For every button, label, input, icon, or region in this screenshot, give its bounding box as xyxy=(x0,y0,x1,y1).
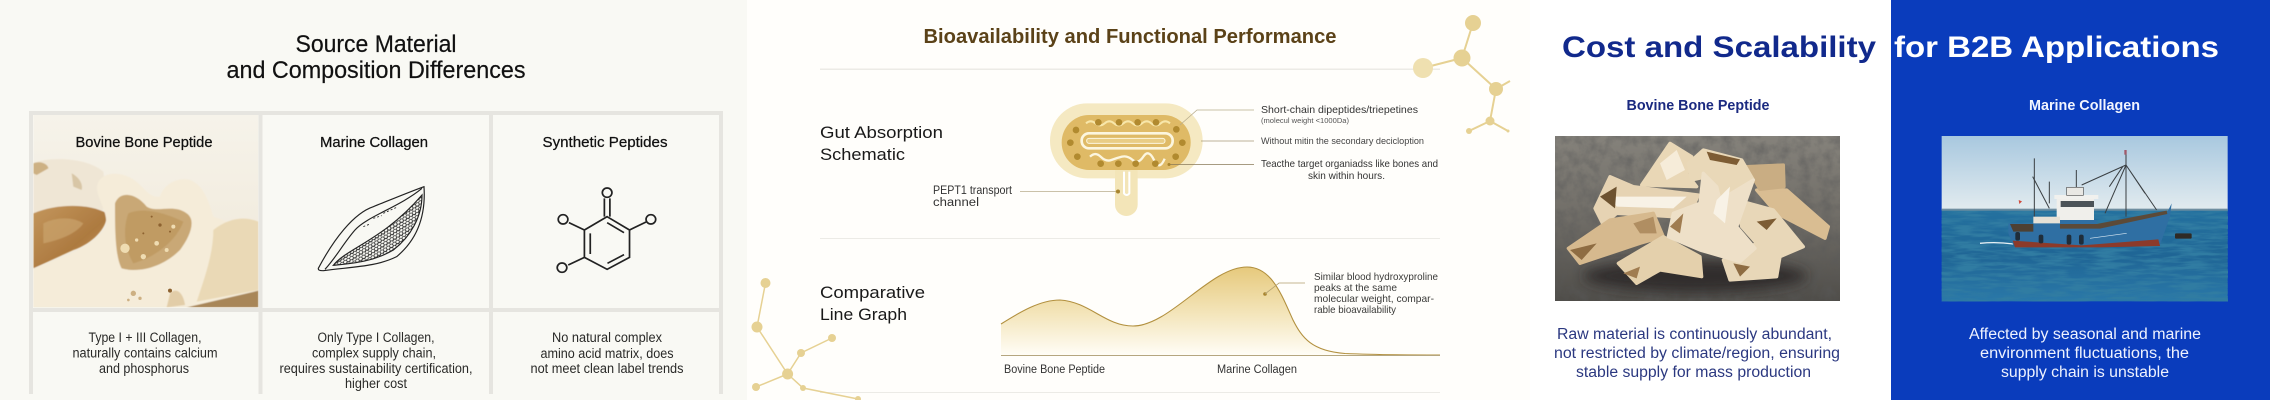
text: bovine composition: naturally contains calcium xyxy=(72,346,218,360)
text: chart annotation: peaks at the same xyxy=(1314,282,1397,294)
title: source material: and Composition Differences xyxy=(226,57,526,84)
callout: target organs xyxy=(1168,158,1438,182)
text: bovine scalability xyxy=(1554,326,1840,381)
molecule decoration: top right xyxy=(1413,15,1510,134)
text: bovine composition: Type I + III Collagen, xyxy=(88,330,202,345)
heading: comparative line graph xyxy=(820,283,925,324)
text: marine composition: Only Type I Collagen, xyxy=(318,330,434,345)
text: chart annotation: Similar blood hydroxyproline xyxy=(1314,271,1438,283)
title: source material xyxy=(226,31,526,84)
heading: comparative line graph: Line Graph xyxy=(820,305,907,324)
column heading: synthetic: Synthetic Peptides xyxy=(542,135,668,151)
text: bovine scalability: stable supply for mass production xyxy=(1576,364,1811,381)
column heading: bovine: Bovine Bone Peptide xyxy=(76,135,212,151)
callout: PEPT1 transport channel xyxy=(933,185,1120,209)
panel: bioavailability xyxy=(747,0,1530,400)
heading: gut absorption: Schematic xyxy=(820,145,906,164)
text: marine scalability: Affected by seasonal and marine xyxy=(1969,326,2201,343)
photo: pile of dried bones xyxy=(1555,136,1840,301)
icon: fish fillet xyxy=(318,187,424,271)
text: synthetic composition: amino acid matrix, does xyxy=(540,346,674,361)
title: source material: Source Material xyxy=(296,31,456,58)
chart: comparative line graph xyxy=(1001,267,1440,376)
heading: gut absorption xyxy=(820,123,943,164)
molecule decoration: bottom left xyxy=(752,278,861,400)
chart: comparative line graph: Bovine Bone Peptide xyxy=(1004,364,1105,376)
diagram: gut schematic xyxy=(1050,103,1203,216)
text: chart annotation xyxy=(1314,271,1438,316)
panel: cost and scalability, marine side xyxy=(1891,0,2270,400)
callout: short-chain peptides: (molecul weight <1000Da) xyxy=(1261,118,1349,125)
title: for B2B applications: for B2B Applications xyxy=(1894,31,2219,64)
heading: comparative line graph: Comparative xyxy=(820,283,925,302)
callout: without secondary decomposition: Without mitin the secondary decicloption xyxy=(1261,136,1424,147)
text: synthetic composition xyxy=(530,330,684,376)
text: synthetic composition: No natural complex xyxy=(552,330,662,345)
title: bioavailability: Bioavailability and Functional Performance xyxy=(924,25,1336,48)
text: marine scalability: environment fluctuations, the xyxy=(1980,345,2189,362)
text: bovine composition: and phosphorus xyxy=(99,361,189,376)
text: bovine composition xyxy=(72,330,218,376)
callout: short-chain peptides: Short-chain dipeptides/triepetines xyxy=(1261,104,1418,116)
heading: gut absorption: Gut Absorption xyxy=(820,123,943,142)
text: chart annotation: rable bioavailability xyxy=(1314,304,1397,316)
text: marine scalability xyxy=(1969,326,2201,381)
photo: fishing boat at sea xyxy=(1942,136,2228,301)
heading: bovine bone peptide: Bovine Bone Peptide xyxy=(1626,97,1770,114)
panel: source material and composition xyxy=(0,0,747,400)
column heading: marine: Marine Collagen xyxy=(320,135,428,151)
text: synthetic composition: not meet clean label trends xyxy=(530,361,684,376)
comparison grid frame xyxy=(29,111,723,394)
panel: cost and scalability, bovine side xyxy=(1530,0,1891,400)
callout: target organs: Teacthe target organiadss like bones and xyxy=(1261,158,1438,170)
callout: PEPT1 transport channel: PEPT1 transport xyxy=(933,185,1013,197)
text: bovine scalability: not restricted by climate/region, ensuring xyxy=(1554,345,1840,362)
heading: marine collagen: Marine Collagen xyxy=(2029,97,2140,114)
photo: bovine bone cross-section xyxy=(33,115,258,307)
icon: synthetic molecule xyxy=(557,188,656,272)
callout: PEPT1 transport channel: channel xyxy=(933,197,979,209)
text: bovine scalability: Raw material is continuously abundant, xyxy=(1557,326,1832,343)
text: marine composition: higher cost xyxy=(345,376,407,391)
text: marine composition xyxy=(280,330,472,391)
text: marine scalability: supply chain is unstable xyxy=(2001,364,2169,381)
callout: short-chain peptides xyxy=(1180,104,1418,125)
callout: target organs: skin within hours. xyxy=(1308,170,1385,182)
text: marine composition: requires sustainability certification, xyxy=(280,361,472,376)
title: cost and scalability: Cost and Scalability xyxy=(1562,31,1876,64)
text: chart annotation: molecular weight, compar- xyxy=(1314,293,1434,305)
text: marine composition: complex supply chain, xyxy=(312,346,436,360)
chart: comparative line graph: Marine Collagen xyxy=(1217,364,1297,376)
